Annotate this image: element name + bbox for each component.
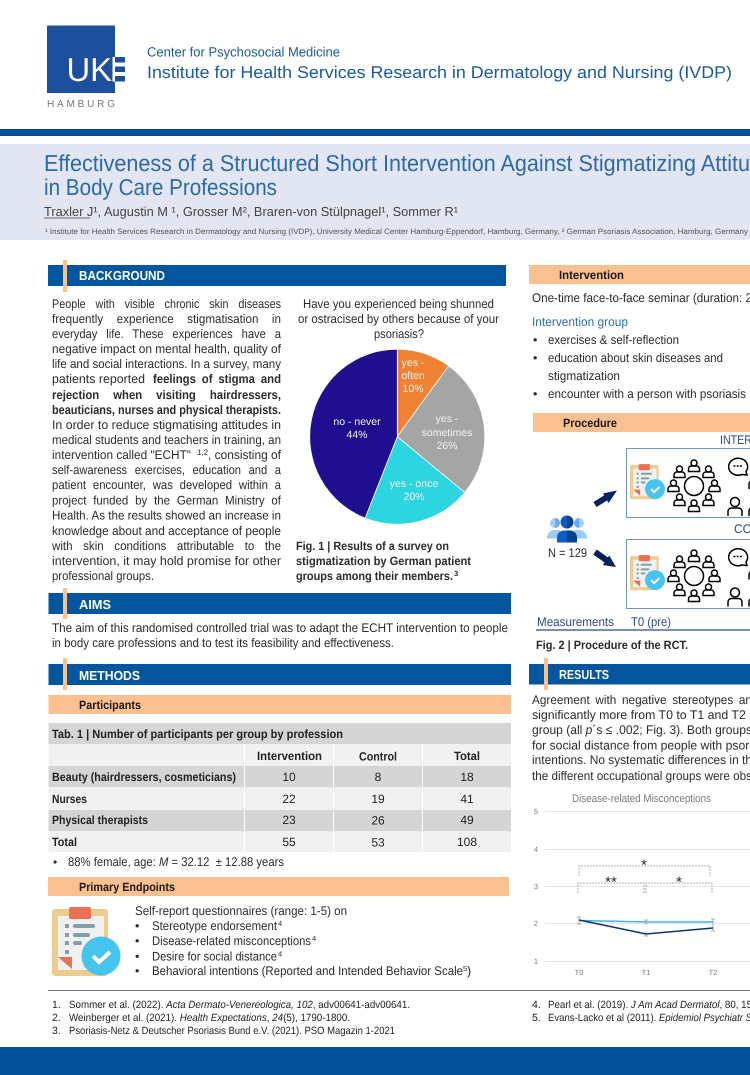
slice: yes often 10%: yes -	[402, 357, 425, 369]
heading: methods: METHODS	[79, 668, 140, 683]
institution heading	[147, 44, 732, 82]
background text: frequently experience stigmatisation in	[52, 312, 281, 326]
figure 2 caption: Fig. 2 | Procedure of the RCT.	[536, 638, 688, 652]
figure 1 caption: stigmatization by German patient	[296, 554, 471, 568]
endpoints list: 4	[278, 919, 282, 928]
icon: clipboard with check	[52, 907, 120, 976]
background text: patient encounter, was developed within a	[52, 478, 281, 492]
table: participants per group: 53	[371, 836, 385, 850]
aims text: The aim of this randomised controlled trial was to adapt the ECHT intervention to people	[52, 621, 508, 635]
title: in Body Care Professions	[44, 174, 277, 200]
figure 1 caption	[296, 539, 471, 583]
x axis labels: T1	[642, 968, 650, 977]
background text: negative impact on mental health, quality of	[52, 342, 281, 356]
divider above references	[48, 990, 750, 992]
slice: no never 44%: 44%	[346, 429, 368, 441]
table: participants per group: 22	[282, 792, 296, 806]
significance brackets: *	[641, 857, 647, 874]
background text: with skin conditions attributable to the	[51, 539, 281, 553]
heading: aims	[48, 588, 511, 619]
references left: 2.	[52, 1012, 61, 1024]
institution heading: Institute for Health Services Research in Dermatology and Nursing (IVDP)	[147, 63, 732, 82]
table: participants per group: Total	[52, 835, 77, 849]
y axis labels: 3	[534, 882, 538, 891]
background text: self-awareness exercises, education and a	[52, 463, 281, 477]
survey question: Have you experienced being shunned	[303, 297, 494, 311]
table: participants per group: Total	[454, 749, 480, 763]
subheading: primary endpoints: Primary Endpoints	[79, 880, 175, 894]
endpoints list: Disease-related misconceptions	[152, 934, 311, 948]
table: participants per group: Tab. 1 | Number of participants per group by profession	[52, 727, 343, 741]
slice: yes often 10%: often	[401, 370, 425, 382]
x axis labels: T2	[709, 968, 717, 977]
endpoints list: 5	[463, 964, 467, 973]
table: participants per group: Beauty (hairdressers, cosmeticians)	[52, 770, 236, 784]
endpoints list: 4	[312, 934, 316, 943]
slice: yes once 20%: 20%	[403, 491, 425, 503]
table: participants per group: Physical therapists	[52, 813, 148, 827]
table: participants per group: Control	[359, 750, 397, 764]
survey question: or ostracised by others because of your	[298, 312, 499, 326]
table: participants per group: 41	[460, 792, 474, 806]
references left: Psoriasis-Netz & Deutscher Psoriasis Bund e.V. (2021). PSO Magazin 1-2021	[69, 1025, 395, 1037]
y axis labels	[534, 807, 538, 966]
box: intervention arm	[626, 448, 750, 518]
heading: methods	[48, 658, 511, 690]
x axis labels	[575, 968, 717, 977]
arrow: to control	[595, 552, 616, 567]
references left: 1.	[52, 999, 61, 1011]
participant demographics: •	[53, 855, 57, 869]
participant demographics: 88% female, age: M = 32.12 ± 12.88 years	[68, 855, 284, 869]
table: participants per group	[48, 723, 511, 852]
icon: participants group	[547, 516, 587, 542]
endpoints list: •	[135, 964, 139, 978]
endpoints list: •	[135, 934, 139, 948]
aims text: in body care professions and to test its feasibility and effectiveness.	[52, 636, 394, 650]
y axis labels: 1	[534, 957, 538, 966]
slice: yes sometimes 26%: 26%	[436, 440, 458, 452]
subheading: participants	[48, 695, 511, 714]
table: participants per group: 49	[460, 813, 474, 827]
aims text	[52, 621, 508, 650]
heading: results: RESULTS	[559, 667, 609, 682]
references left: Sommer et al. (2022). Acta Dermato-Venereologica, 102, adv00641-adv00641.	[69, 999, 410, 1011]
footer bar	[0, 1047, 750, 1075]
logo: UKE Hamburg	[47, 26, 125, 110]
intervention group list: •	[533, 333, 537, 347]
subheading: participants: Participants	[79, 698, 141, 712]
table: participants per group: Intervention	[257, 749, 322, 763]
significance brackets	[578, 857, 712, 893]
references left	[52, 999, 410, 1037]
slice: yes often 10%	[397, 349, 449, 437]
affiliations: ¹ Institute for Health Services Research in Dermatology and Nursing (IVDP), University Medical Center Hamburg-Eppendorf, Hamburg, Germany, ² German Psoriasis Association, Hamburg, Germany	[45, 227, 748, 236]
background text: everyday life. These experiences have a	[52, 327, 281, 341]
line chart: disease-related misconceptions	[534, 793, 750, 977]
results text: significantly more from T0 to T1 and T2 i	[532, 708, 750, 722]
background text: beauticians, nurses and physical therapists.	[52, 403, 281, 417]
slice: yes often 10%: 10%	[402, 383, 424, 395]
endpoints list: Behavioral intentions (Reported and Intended Behavior Scale	[152, 964, 463, 978]
title band	[0, 144, 750, 240]
series: control	[579, 920, 713, 922]
table: participants per group: 55	[282, 835, 296, 849]
background text	[51, 297, 282, 583]
slice: yes once 20%	[365, 437, 465, 524]
results text	[532, 693, 750, 783]
y axis labels: 4	[534, 845, 538, 854]
table: participants per group: 8	[375, 770, 382, 784]
heading: background: BACKGROUND	[79, 268, 165, 283]
intervention group list: education about skin diseases and	[548, 351, 723, 365]
measurement timeline: T0 (pre)	[631, 615, 671, 629]
subheading: primary endpoints	[48, 877, 509, 896]
background text: knowledge about and acceptance of people	[52, 524, 281, 538]
background text: intervention, it may hold promise for other	[52, 554, 281, 568]
heading: results	[529, 658, 750, 690]
subheading: intervention: Intervention	[559, 268, 624, 282]
arrow: to intervention	[595, 490, 617, 504]
figure 1 caption: Fig. 1 | Results of a survey on	[296, 539, 449, 553]
table: participants per group: Nurses	[52, 792, 87, 806]
references left: Weinberger et al. (2021). Health Expectations, 24(5), 1790-1800.	[69, 1012, 350, 1024]
survey question: psoriasis?	[374, 327, 424, 341]
slice: yes sometimes 26%	[397, 366, 485, 492]
box: control arm	[626, 540, 750, 608]
background text: , consisting of	[208, 448, 281, 462]
slice: no never 44%: no - never	[333, 416, 381, 428]
sample size: N = 129	[548, 546, 587, 560]
background text: life and social interactions. In a survey, many	[52, 357, 282, 371]
background text: patients reported	[52, 372, 145, 386]
procedure diagram	[536, 433, 750, 630]
significance brackets: *	[676, 874, 682, 891]
endpoints list: •	[135, 950, 139, 964]
heading: aims: AIMS	[79, 597, 111, 612]
slice: yes once 20%: yes - once	[390, 478, 438, 490]
table: participants per group: 23	[282, 813, 296, 827]
figure 1 caption: groups among their members.	[296, 569, 453, 583]
table: participants per group: 26	[371, 814, 385, 828]
intervention group list: exercises & self-reflection	[548, 333, 679, 347]
references left: 3.	[52, 1025, 61, 1037]
endpoints list: )	[467, 964, 471, 978]
significance brackets: **	[605, 874, 617, 891]
pie chart: stigma experiences	[310, 349, 485, 524]
endpoints list: Desire for social distance	[152, 950, 277, 964]
table: participants per group: 10	[282, 770, 296, 784]
background text: 1,2	[197, 448, 209, 457]
references right: 5.	[532, 1012, 541, 1024]
endpoints list: •	[135, 919, 139, 933]
background text: Health. As the results showed an increase in	[52, 508, 281, 522]
background text: rejection when visiting hairdressers,	[52, 388, 281, 402]
intervention group list	[532, 315, 746, 401]
subheading: intervention	[529, 265, 750, 284]
survey question	[298, 297, 499, 341]
series: intervention	[579, 920, 713, 934]
background text: In order to reduce stigmatising attitudes in	[52, 418, 281, 432]
references right: 4.	[532, 999, 541, 1011]
heading: background	[48, 260, 506, 292]
table: participants per group: 108	[457, 835, 477, 849]
measurement timeline: Measurements	[537, 615, 614, 629]
background text: intervention called "ECHT"	[52, 448, 191, 462]
table: participants per group: 18	[460, 770, 474, 784]
endpoints list: Stereotype endorsement	[152, 919, 277, 933]
background text: People with visible chronic skin diseases	[52, 297, 281, 311]
intervention group list: •	[533, 351, 537, 365]
background text: project funded by the German Ministry of	[52, 494, 281, 508]
references right	[532, 999, 750, 1024]
slice: yes sometimes 26%: yes -	[436, 413, 459, 425]
subheading: procedure: Procedure	[563, 416, 617, 430]
chart title: Disease-related Misconceptions	[572, 793, 711, 805]
table: participants per group: 19	[371, 792, 385, 806]
figure 1 caption: 3	[454, 569, 458, 578]
slice: no never 44%	[310, 349, 397, 518]
institution heading: Center for Psychosocial Medicine	[147, 44, 340, 60]
x axis labels: T0	[575, 968, 583, 977]
intervention group list: Intervention group	[532, 315, 628, 329]
intervention group list: stigmatization	[548, 369, 620, 383]
references right: Pearl et al. (2019). J Am Acad Dermatol, 80, 15	[548, 999, 750, 1011]
measurement timeline	[536, 615, 750, 630]
endpoints list	[135, 904, 471, 978]
y axis labels: 2	[534, 919, 538, 928]
title	[44, 150, 750, 200]
y axis labels: 5	[534, 807, 538, 816]
intervention group list: •	[533, 387, 537, 401]
background text: medical students and teachers in training, an	[52, 433, 281, 447]
error bars	[577, 917, 715, 936]
logo: UKE Hamburg: UK	[66, 51, 112, 88]
endpoints list: Self-report questionnaires (range: 1-5) on	[135, 904, 347, 918]
background text: feelings of stigma and	[153, 372, 281, 386]
authors: Traxler J¹, Augustin M ¹, Grosser M², Braren-von Stülpnagel¹, Sommer R¹	[44, 204, 459, 219]
slice: yes sometimes 26%: sometimes	[422, 427, 472, 439]
background text: professional groups.	[52, 569, 154, 583]
subheading: procedure	[533, 413, 750, 432]
top blue bar	[0, 129, 750, 136]
endpoints list: 4	[278, 950, 282, 958]
logo: UKE Hamburg: HAMBURG	[47, 99, 115, 110]
